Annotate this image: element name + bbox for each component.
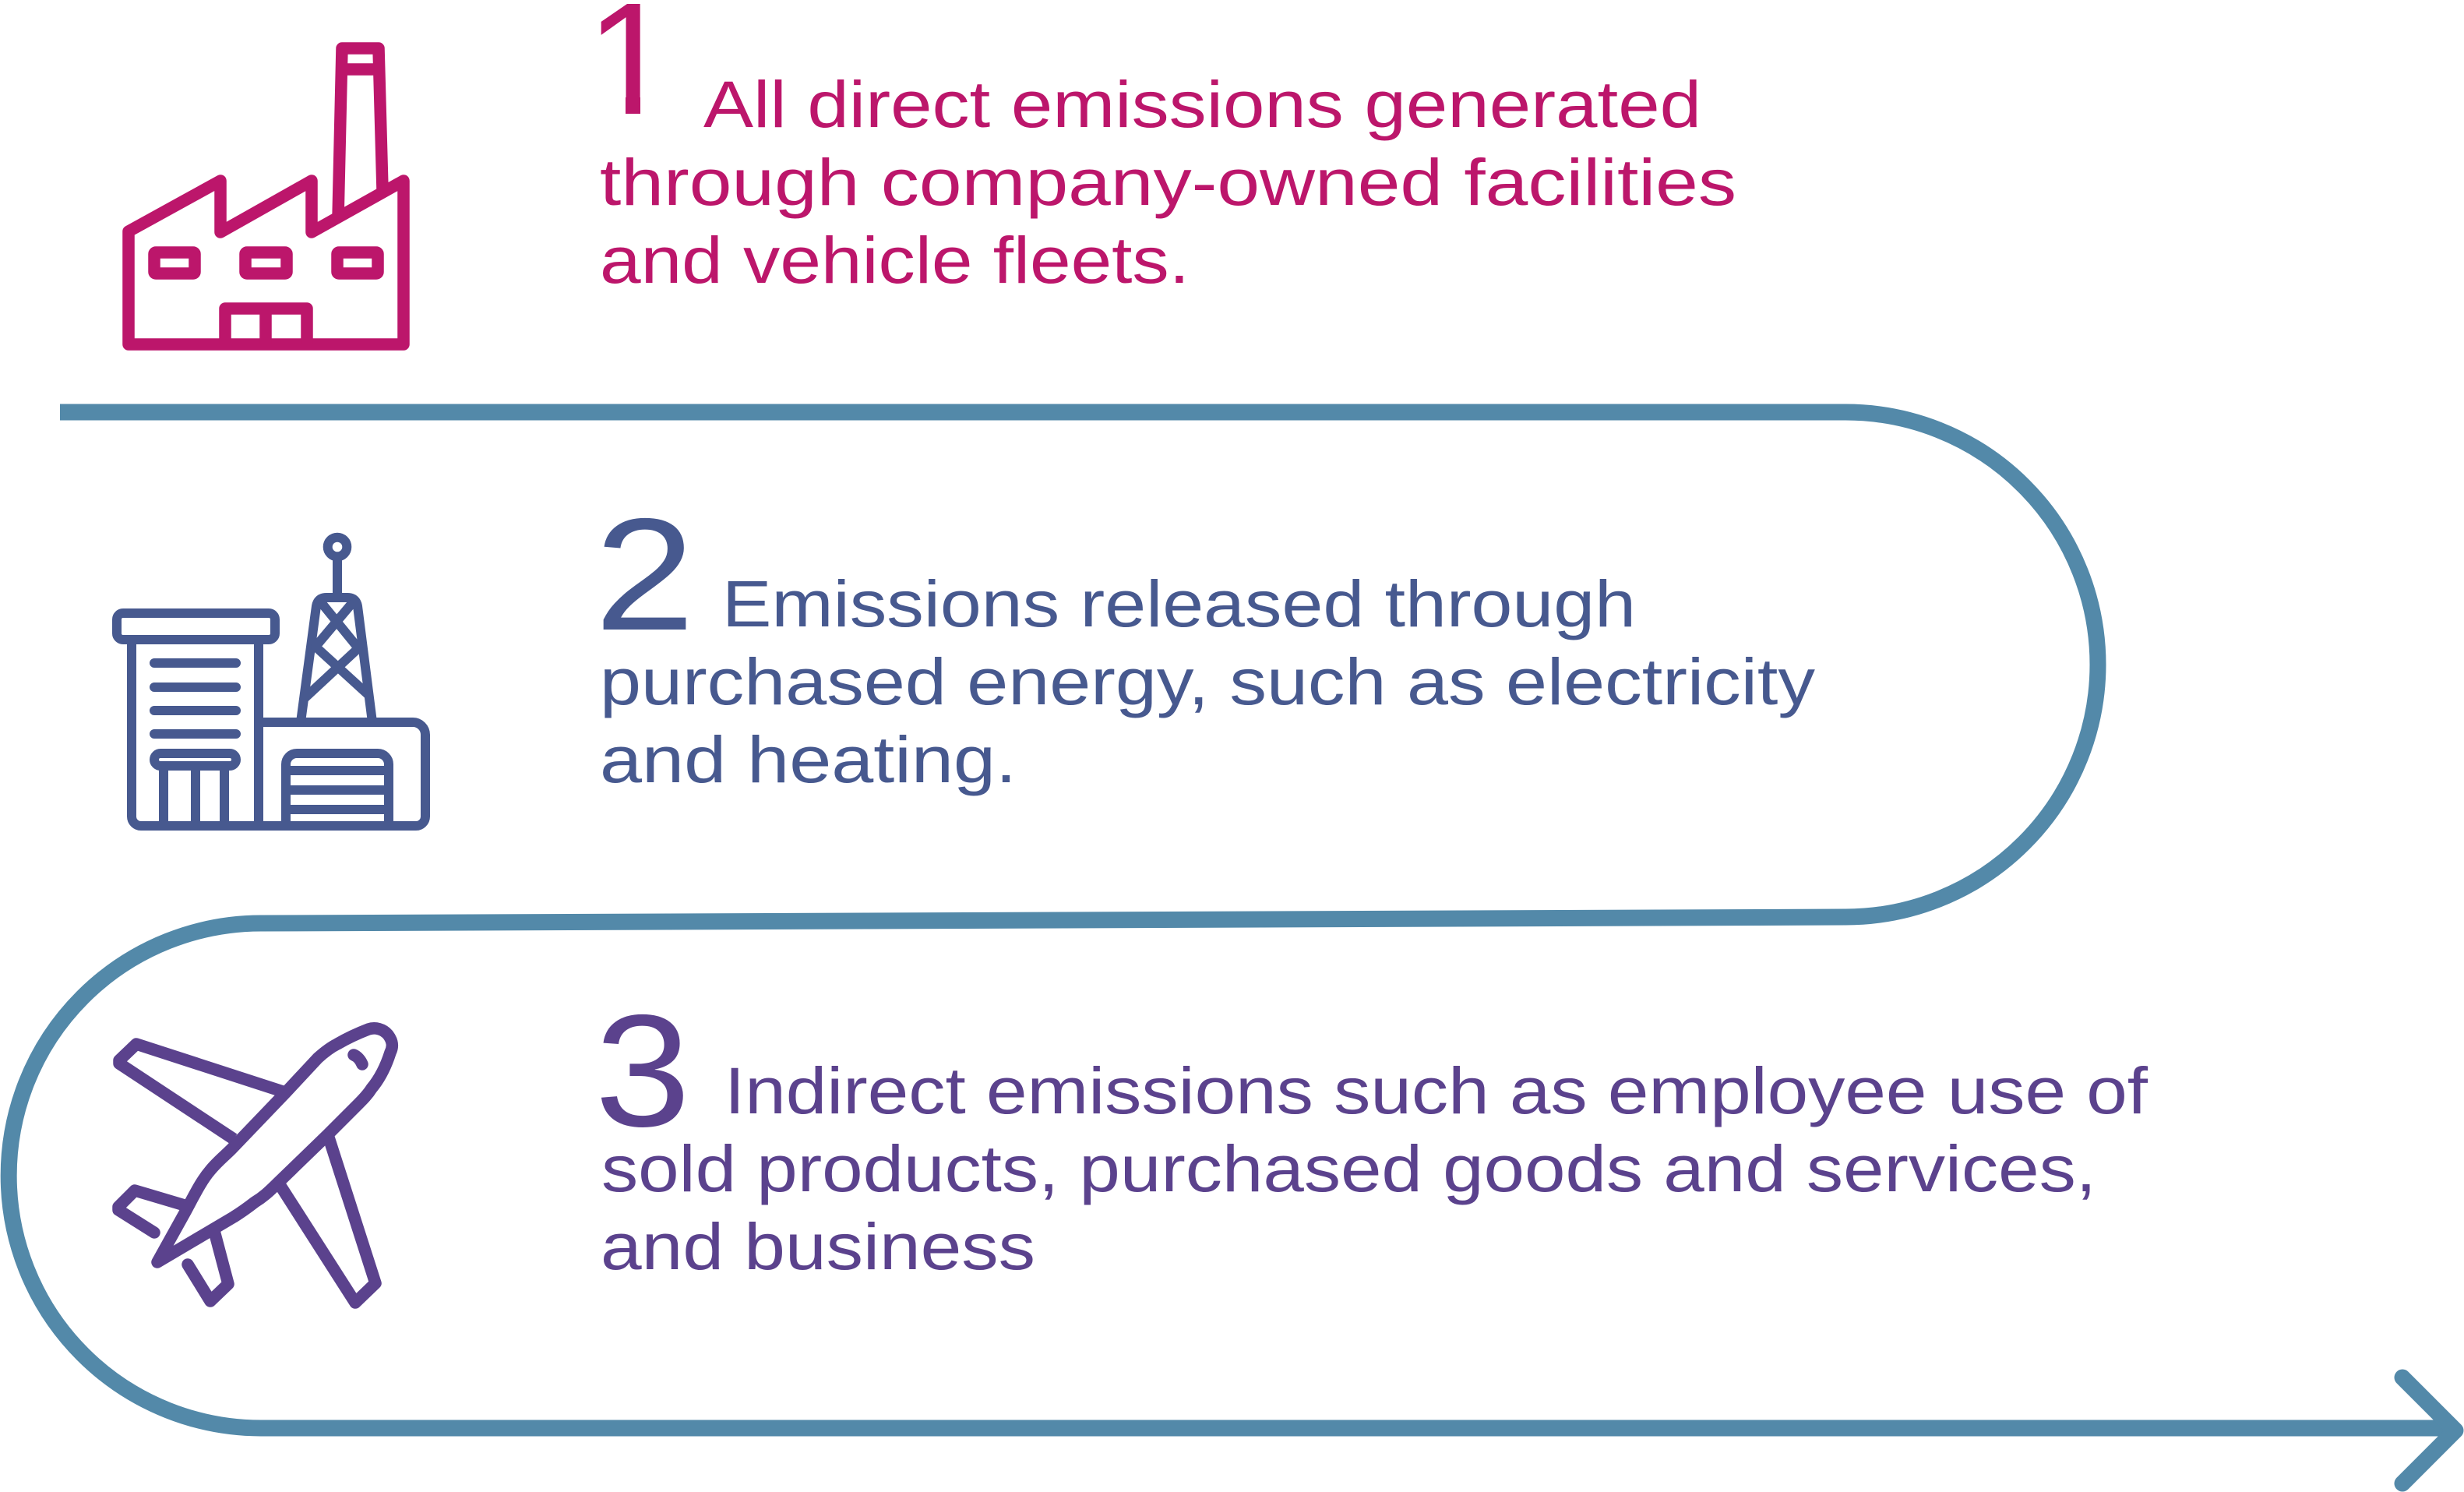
text: scope 2 description: Emissions released through <box>722 567 1636 640</box>
text: scope 2 description: purchased energy, such as electricity <box>600 645 1815 718</box>
text: scope 1 description <box>600 68 1736 297</box>
number 2: 2 <box>594 485 695 664</box>
text: scope 2 description <box>600 567 1815 796</box>
number 3: 3 <box>595 982 690 1160</box>
number 1 <box>601 4 640 114</box>
text: scope 1 description: All direct emissions generated <box>703 68 1701 141</box>
icon: airplane <box>118 1028 392 1303</box>
section 2 <box>117 485 1815 826</box>
text: scope 2 description: and heating. <box>600 723 1017 796</box>
text: scope 3 description: Indirect emissions such as employee use of <box>724 1054 2149 1127</box>
text: scope 3 description: and business <box>601 1210 1035 1283</box>
text: scope 3 description: sold products, purchased goods and services, <box>601 1132 2096 1205</box>
section 3 <box>118 982 2149 1303</box>
text: scope 1 description: and vehicle fleets. <box>600 224 1190 297</box>
winding arrow path <box>9 412 2455 1483</box>
text: scope 1 description: through company-owned facilities <box>600 146 1736 219</box>
text: scope 3 description <box>601 1054 2149 1283</box>
icon: building with tower <box>117 538 425 826</box>
section 1 <box>129 0 1736 344</box>
icon: factory <box>129 48 404 344</box>
